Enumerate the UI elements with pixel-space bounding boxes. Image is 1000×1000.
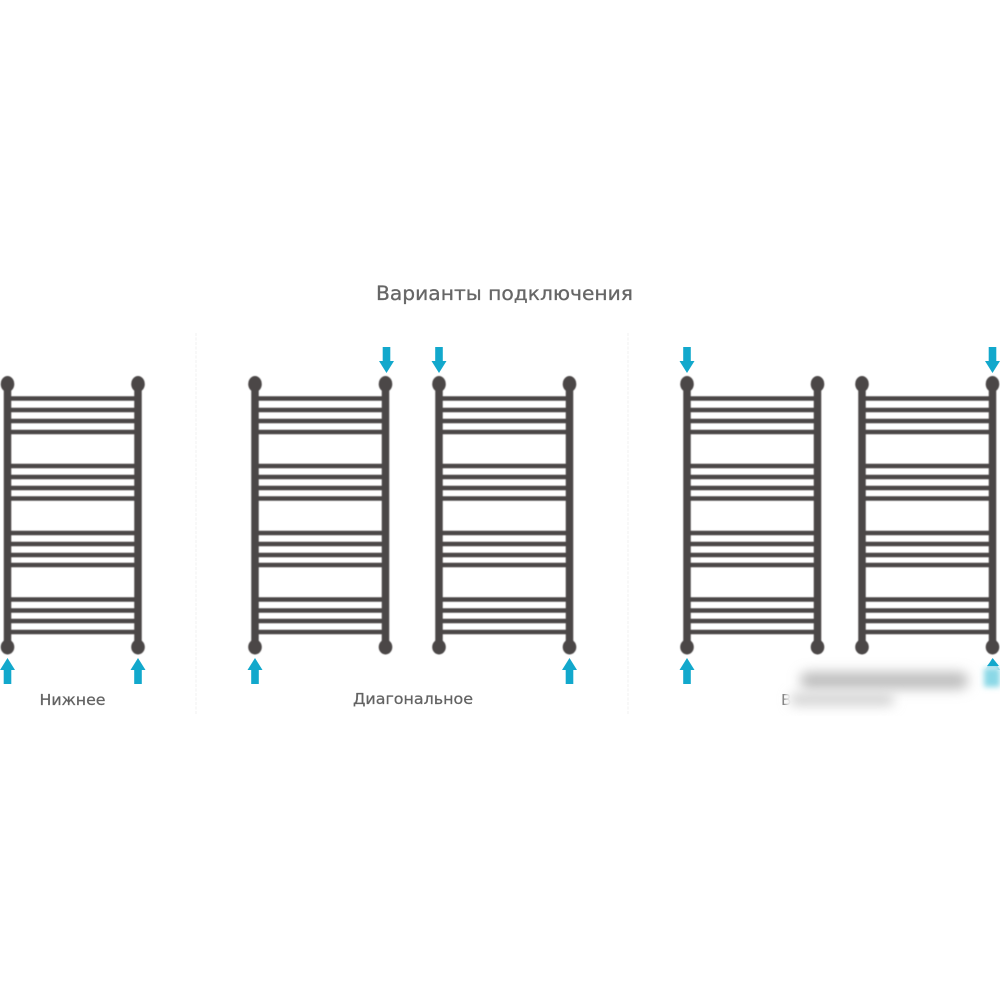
label: diagonal: Диагональное [353,690,473,708]
radiator: side B [855,376,999,654]
blurred redaction [786,658,1000,715]
radiator: bottom connection [1,376,145,654]
panel: side connection [680,347,1000,709]
arrow: side B bottom, partly blurred [985,658,1000,684]
arrows: side A [680,347,694,684]
panel: diagonal connection [248,347,577,708]
arrows: diagonal B [432,347,577,684]
arrow: side B top [985,347,1000,373]
arrows: bottom inlets [0,658,146,684]
radiator: diagonal B [432,376,576,654]
title: Варианты подключения [376,282,633,305]
label: bottom: Нижнее [40,691,106,709]
radiator: diagonal A [248,376,392,654]
label: side, partly covered: В [781,691,792,709]
radiator: side A [680,376,824,654]
panel: bottom connection [0,376,146,709]
arrows: diagonal A [248,347,394,684]
